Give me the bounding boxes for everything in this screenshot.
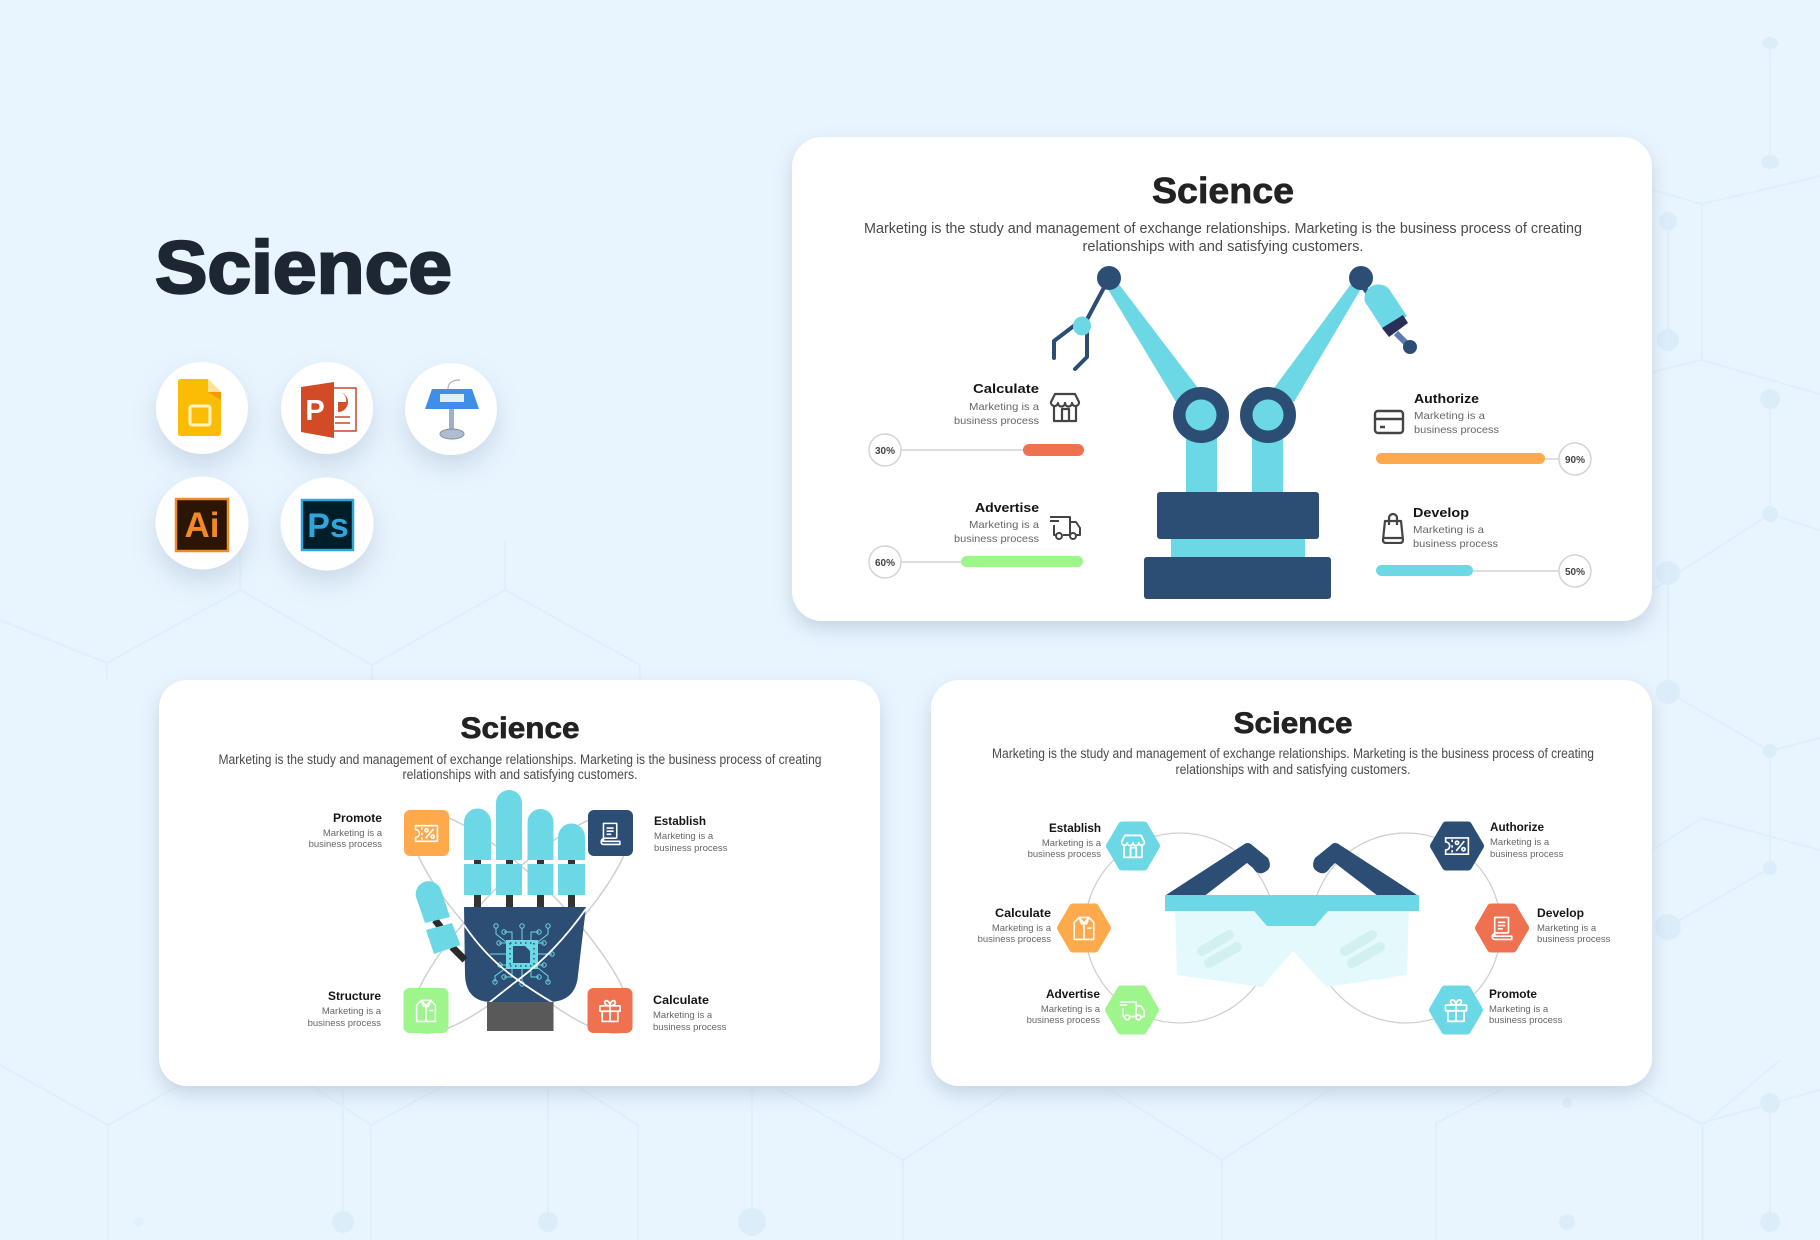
item: Promote: Promote bbox=[1489, 987, 1537, 1001]
item: Establish bbox=[588, 810, 728, 856]
item: Structure: Structure bbox=[328, 989, 381, 1003]
description: Marketing is the study and management of exchange relationships. Marketing is the business process of creating bbox=[864, 220, 1582, 237]
item: Advertise: Advertise bbox=[1046, 987, 1100, 1001]
description: Marketing is the study and management of exchange relationships. Marketing is the business process of creating bbox=[218, 752, 822, 767]
software icons bbox=[156, 362, 497, 570]
item: Establish bbox=[1028, 821, 1156, 866]
icon: Illustrator bbox=[156, 476, 248, 570]
item: Authorize: 90% bbox=[1565, 455, 1585, 466]
icon: Keynote bbox=[405, 363, 497, 455]
circuit chip bbox=[490, 924, 554, 986]
item: Establish: Establish bbox=[654, 814, 706, 828]
item: Calculate: Calculate bbox=[995, 906, 1051, 920]
item: Develop bbox=[1479, 906, 1611, 948]
icon: Photoshop bbox=[280, 478, 374, 570]
item: Develop: Develop bbox=[1537, 906, 1584, 920]
item: Authorize: Authorize bbox=[1414, 391, 1479, 406]
item: Develop: business process bbox=[1413, 538, 1498, 550]
panel background bbox=[792, 137, 1652, 621]
item: Structure bbox=[308, 988, 448, 1033]
item: Structure: Marketing is a bbox=[322, 1006, 382, 1017]
item: Calculate: business process bbox=[978, 934, 1051, 945]
item: Calculate bbox=[978, 906, 1107, 948]
icon: Illustrator: Ai bbox=[184, 506, 220, 545]
item: Develop: Develop bbox=[1413, 505, 1469, 520]
white crossing lines bbox=[464, 907, 586, 1002]
item: Calculate bbox=[869, 381, 1084, 466]
item: Establish: business process bbox=[654, 843, 728, 854]
robot hand illustration bbox=[416, 790, 586, 1031]
item: Advertise: Advertise bbox=[975, 500, 1039, 515]
panel: robot arm slide bbox=[792, 137, 1652, 621]
item: Advertise bbox=[1027, 987, 1155, 1030]
item: Advertise: 60% bbox=[875, 558, 895, 569]
item: Advertise: Marketing is a bbox=[969, 519, 1039, 531]
item: Authorize: business process bbox=[1490, 849, 1564, 860]
item: Authorize: Authorize bbox=[1490, 820, 1544, 834]
heading: Science bbox=[1234, 707, 1352, 740]
main title: Science bbox=[155, 226, 452, 309]
description: relationships with and satisfying customers. bbox=[1082, 238, 1364, 255]
item: Authorize: Marketing is a bbox=[1490, 837, 1550, 848]
item: Authorize: business process bbox=[1414, 424, 1499, 436]
item: Calculate: Calculate bbox=[653, 993, 709, 1007]
item: Calculate: Calculate bbox=[973, 381, 1039, 396]
item: Promote: business process bbox=[1489, 1015, 1563, 1026]
item: Authorize: Marketing is a bbox=[1414, 410, 1485, 422]
item: Calculate: business process bbox=[653, 1022, 727, 1033]
description: relationships with and satisfying customers. bbox=[1176, 762, 1410, 777]
item: Develop: Marketing is a bbox=[1413, 524, 1484, 536]
item: Calculate: Marketing is a bbox=[992, 923, 1052, 934]
connector circles bbox=[1085, 833, 1501, 1023]
item: Calculate: 30% bbox=[875, 446, 895, 457]
panel background bbox=[159, 680, 880, 1086]
item: Promote bbox=[309, 810, 449, 856]
icon: Google Slides bbox=[156, 362, 248, 454]
item: Develop bbox=[1376, 505, 1591, 587]
item: Promote: business process bbox=[309, 839, 382, 850]
heading: Science bbox=[1152, 170, 1294, 211]
item: Advertise: business process bbox=[1027, 1015, 1100, 1026]
heading: Science bbox=[460, 712, 580, 745]
item: Promote: Marketing is a bbox=[1489, 1004, 1549, 1015]
icon: PowerPoint: P bbox=[305, 395, 325, 427]
item: Advertise: business process bbox=[954, 533, 1039, 545]
item: Calculate: Marketing is a bbox=[969, 401, 1039, 413]
item: Promote: Promote bbox=[333, 811, 382, 825]
robot illustration bbox=[1054, 266, 1417, 599]
item: Establish: Marketing is a bbox=[1042, 838, 1102, 849]
item: Structure: business process bbox=[308, 1018, 381, 1029]
item: Promote: Marketing is a bbox=[323, 828, 383, 839]
item: Advertise: Marketing is a bbox=[1041, 1004, 1101, 1015]
description: relationships with and satisfying customers. bbox=[402, 767, 638, 782]
panel: robot hand slide bbox=[159, 680, 880, 1086]
item: Establish: business process bbox=[1028, 849, 1101, 860]
item: Establish: Marketing is a bbox=[654, 831, 714, 842]
item: Calculate: business process bbox=[954, 415, 1039, 427]
icon: Photoshop: Ps bbox=[307, 507, 349, 545]
item: Authorize bbox=[1434, 820, 1564, 866]
goggles illustration bbox=[1165, 843, 1419, 987]
panel background bbox=[931, 680, 1652, 1086]
item: Calculate: Marketing is a bbox=[653, 1010, 713, 1021]
item: Establish: Establish bbox=[1049, 821, 1101, 835]
item: Advertise bbox=[869, 500, 1083, 578]
item: Develop: Marketing is a bbox=[1537, 923, 1597, 934]
item: Develop: business process bbox=[1537, 934, 1611, 945]
icon: PowerPoint bbox=[281, 362, 373, 454]
item: Authorize bbox=[1375, 391, 1591, 475]
item: Promote bbox=[1433, 987, 1563, 1030]
item: Develop: 50% bbox=[1565, 567, 1585, 578]
description: Marketing is the study and management of exchange relationships. Marketing is the business process of creating bbox=[992, 746, 1594, 761]
connector ellipses bbox=[385, 787, 657, 1059]
panel: safety goggles slide bbox=[931, 680, 1652, 1086]
item: Calculate bbox=[588, 988, 727, 1033]
